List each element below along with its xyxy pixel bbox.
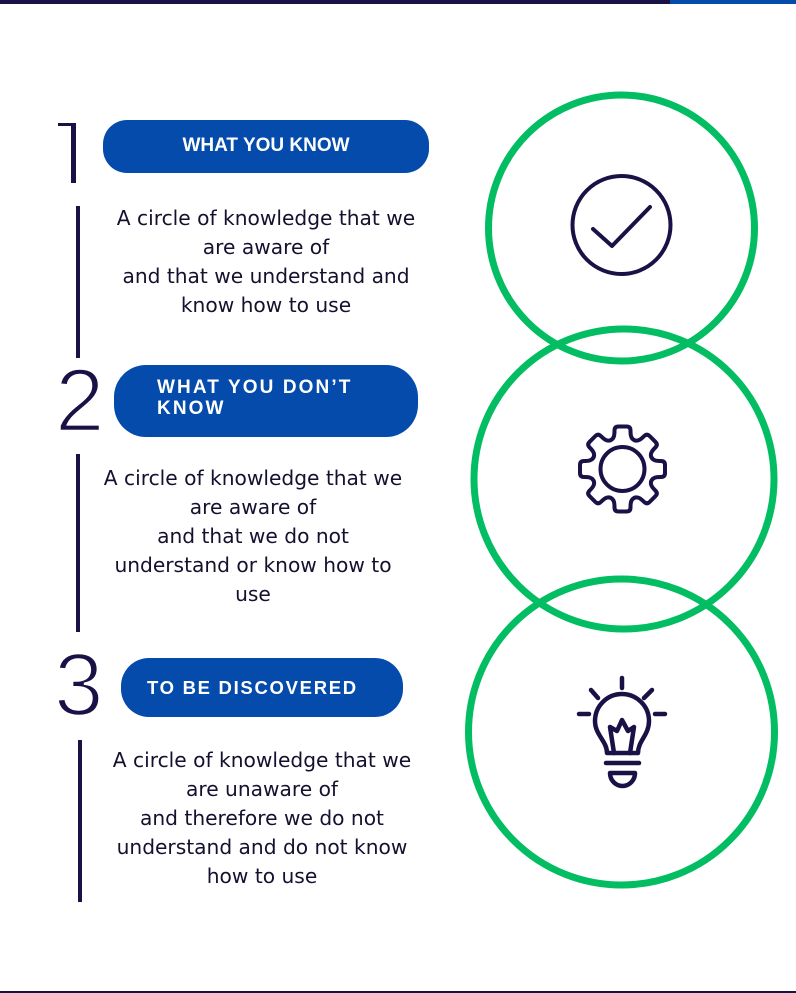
heading pill: what you know: [103, 120, 429, 173]
text block 3: are unaware of: [186, 777, 338, 801]
text block 2: are aware of: [190, 495, 316, 519]
text block 3: A circle of knowledge that we: [113, 748, 411, 772]
text block 2: understand or know how to: [114, 553, 392, 577]
vertical bar 3: [78, 740, 82, 902]
bottom bar: [0, 991, 796, 993]
circle 3: [468, 579, 774, 885]
icon: gear: [580, 426, 665, 512]
text block 1: are aware of: [203, 235, 329, 259]
circle 2: [474, 329, 774, 629]
text block 2: use: [235, 582, 271, 606]
heading pill: what you don't know: KNOW: [157, 398, 226, 419]
heading pill: what you don't know: [114, 365, 418, 437]
text block 2: A circle of knowledge that we: [104, 466, 402, 490]
icon: check: [572, 176, 670, 274]
number 3: 3: [54, 634, 104, 734]
heading pill: to be discovered: [121, 658, 403, 717]
vertical bar 1: [76, 206, 80, 358]
vertical bar 2: [76, 454, 80, 632]
text block 3: understand and do not know: [117, 835, 407, 859]
icon: light bulb: [579, 678, 665, 786]
text block 3: and therefore we do not: [140, 806, 384, 830]
top bar: [0, 0, 796, 4]
text block 1: [116, 206, 415, 317]
text block 1: A circle of knowledge that we: [117, 206, 415, 230]
number 2: 2: [55, 350, 104, 450]
text block 1: know how to use: [181, 293, 351, 317]
circle 1: [488, 95, 754, 361]
heading pill: what you know: WHAT YOU KNOW: [182, 135, 350, 156]
heading pill: what you don't know: WHAT YOU DON’T: [157, 377, 352, 398]
heading pill: to be discovered: TO BE DISCOVERED: [147, 677, 358, 698]
text block 2: [104, 466, 402, 606]
text block 1: and that we understand and: [122, 264, 410, 288]
text block 2: and that we do not: [157, 524, 349, 548]
text block 3: how to use: [207, 864, 317, 888]
text block 3: [112, 748, 411, 888]
